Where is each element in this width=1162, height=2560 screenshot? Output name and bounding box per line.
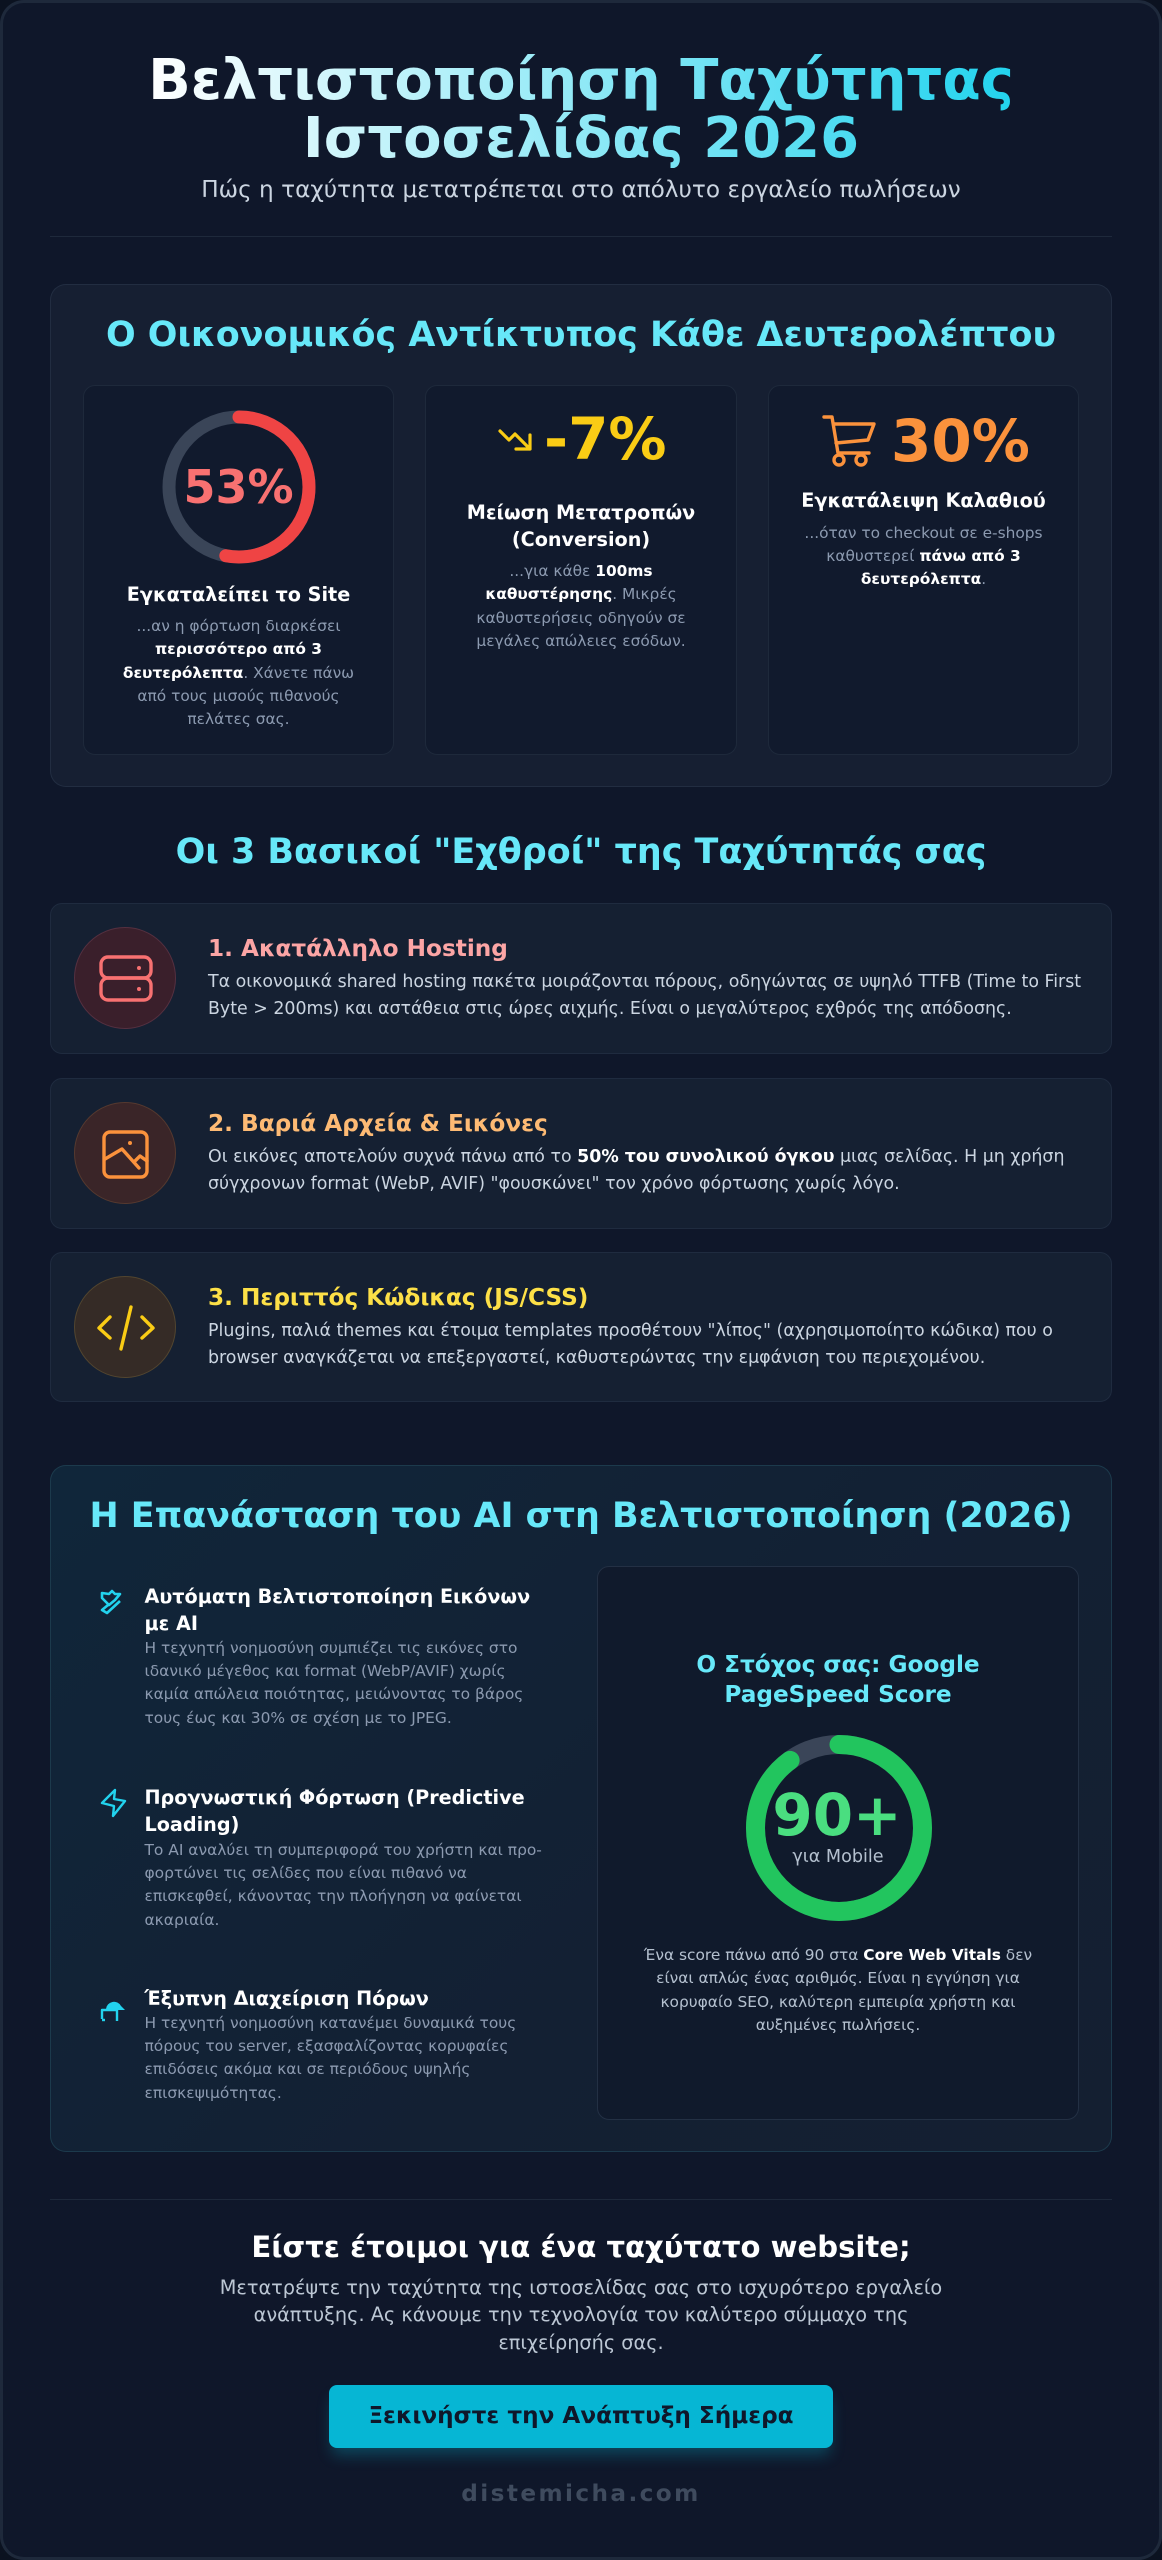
goal heading: PageSpeed Score [724, 1681, 952, 1708]
stat: 30 percent: 30% [891, 407, 1030, 475]
card title: (Conversion) [512, 528, 650, 551]
card description: ...αν η φόρτωση διαρκέσει [136, 617, 341, 635]
feature description [144, 2014, 516, 2102]
card title [467, 501, 695, 551]
footer heading: Είστε έτοιμοι για ένα ταχύτατο website; [251, 2230, 911, 2264]
stat: minus 7 percent: -7% [544, 405, 667, 473]
enemy description: Plugins, παλιά themes και έτοιμα templates προσθέτουν "λίπος" (αχρησιμοποίητο κώδικα) που ο [208, 1321, 1053, 1341]
card description: καθυστερήσεις οδηγούν σε [476, 609, 686, 627]
ring chart: 53 percent [162, 410, 316, 564]
goal heading: Ο Στόχος σας: Google [696, 1650, 980, 1678]
enemy description: Οι εικόνες αποτελούν συχνά πάνω από το 50% του συνολικού όγκου μιας σελίδας. Η μη χρήση [208, 1147, 1064, 1167]
card description [804, 524, 1043, 588]
enemy description [208, 1321, 1053, 1368]
enemy title: 3. Περιττός Κώδικας (JS/CSS) [208, 1284, 588, 1311]
subtitle: Πώς η ταχύτητα μετατρέπεται στο απόλυτο εργαλείο πωλήσεων [201, 176, 961, 202]
card: minus 7 percent conversion [425, 385, 737, 755]
enemy title: 2. Βαριά Αρχεία & Εικόνες [208, 1110, 548, 1137]
enemy title: 1. Ακατάλληλο Hosting [208, 935, 508, 962]
feature description [144, 1840, 542, 1929]
feature description: επισκεψιμότητας. [144, 2084, 282, 2102]
ring chart: 90 plus [746, 1735, 932, 1921]
card: 53 percent leave [83, 385, 394, 755]
feature description: ακαριαία. [144, 1911, 219, 1929]
card title: Εγκατάλειψη Καλαθιού [801, 489, 1046, 512]
icon: lightning bolt [100, 1788, 126, 1818]
icon: resource management [100, 2002, 125, 2022]
enemy description: Τα οικονομικά shared hosting πακέτα μοιράζονται πόρους, οδηγώντας σε υψηλό TTFB (Time to First [208, 972, 1081, 992]
feature description: Η τεχνητή νοημοσύνη κατανέμει δυναμικά τους [144, 2014, 516, 2032]
icon: server [74, 927, 176, 1029]
card description [476, 562, 686, 650]
heading: three enemies: Οι 3 Βασικοί "Εχθροί" της Ταχύτητάς σας [176, 832, 986, 872]
card description: δευτερόλεπτα. Χάνετε πάνω [123, 664, 354, 682]
feature title: predictive loading [144, 1786, 525, 1836]
goal description: Ένα score πάνω από 90 στα Core Web Vitals δεν [644, 1946, 1032, 1964]
stat label: για Mobile [792, 1847, 884, 1867]
footer text: Μετατρέψτε την ταχύτητα της ιστοσελίδας σας στο ισχυρότερο εργαλείο [220, 2276, 942, 2298]
call to action button: Ξεκινήστε την Ανάπτυξη Σήμερα [368, 2403, 794, 2429]
footer text: επιχείρησής σας. [498, 2330, 664, 2354]
feature title: image optimization: Αυτόματη Βελτιστοποίηση Εικόνων [144, 1585, 530, 1608]
feature description: επιδόσεις ακόμα και σε περιόδους υψηλής [144, 2060, 470, 2078]
card description: δευτερόλεπτα. [861, 570, 986, 588]
feature description: φορτώνει τις σελίδες που είναι πιθανό να [144, 1864, 467, 1882]
goal description [644, 1946, 1032, 2034]
icon: shopping cart [822, 415, 876, 467]
stat: 90 plus: 90+ [772, 1781, 902, 1849]
feature description: ιδανικό μέγεθος και format (WebP/AVIF) χωρίς [144, 1662, 506, 1680]
card title: Μείωση Μετατροπών [467, 501, 695, 524]
goal description: είναι απλώς ένας αριθμός. Είναι η εγγύηση για [656, 1969, 1020, 1987]
goal description: αυξημένες πωλήσεις. [756, 2016, 920, 2034]
panel: enemy 3 code [50, 1252, 1112, 1402]
feature title: image optimization [144, 1585, 530, 1635]
card description: ...για κάθε 100ms [509, 562, 653, 580]
footer text [220, 2276, 942, 2354]
panel: economic impact [50, 284, 1112, 787]
panel: enemy 2 images [50, 1078, 1112, 1229]
icon: trending down [498, 429, 532, 451]
enemy description: browser αναγκάζεται να επεξεργαστεί, καθυστερώντας την εμφάνιση του περιεχομένου. [208, 1348, 985, 1368]
call to action button [329, 2385, 833, 2448]
title: Ιστοσελίδας 2026 [303, 106, 859, 171]
goal description: κορυφαίο SEO, καλύτερη εμπειρία χρήστη και [660, 1993, 1016, 2011]
feature description [144, 1638, 523, 1727]
stat: 53 percent: 53% [183, 460, 294, 514]
enemy description [208, 972, 1081, 1019]
enemy description: σύγχρονων format (WebP, AVIF) "φουσκώνει" τον χρόνο φόρτωσης χωρίς λόγο. [208, 1174, 900, 1194]
panel: enemy 1 hosting [50, 903, 1112, 1054]
feature description: Το AI αναλύει τη συμπεριφορά του χρήστη και προ- [144, 1840, 542, 1858]
title: Βελτιστοποίηση Ταχύτητας [148, 48, 1014, 113]
panel: PageSpeed goal [597, 1566, 1079, 2120]
card description: καθυστερεί πάνω από 3 [826, 547, 1021, 565]
card: 30 percent cart abandonment [768, 385, 1079, 755]
card description: καθυστέρησης. Μικρές [485, 585, 677, 603]
feature description: καμία απώλεια ποιότητας, μειώνοντας το βάρος [144, 1685, 523, 1703]
footer text: ανάπτυξης. Ας κάνουμε την τεχνολογία τον καλύτερο σύμμαχο της [254, 2303, 908, 2326]
feature description: πόρους του server, εξασφαλίζοντας κορυφαίες [144, 2037, 508, 2055]
icon: code [74, 1276, 176, 1378]
goal heading [696, 1650, 980, 1708]
card title: Εγκαταλείπει το Site [127, 583, 350, 606]
enemy description [208, 1147, 1064, 1194]
card description: πελάτες σας. [187, 710, 290, 728]
feature description: τους έως και 30% σε σχέση με το JPEG. [144, 1709, 452, 1727]
site name: distemicha.com [461, 2480, 701, 2507]
feature description: Η τεχνητή νοημοσύνη συμπιέζει τις εικόνες στο [144, 1638, 517, 1656]
title [148, 48, 1014, 171]
feature title: predictive loading: Προγνωστική Φόρτωση (Predictive [144, 1786, 525, 1809]
panel: AI revolution [50, 1465, 1112, 2152]
card description [123, 617, 354, 728]
icon: image [74, 1102, 176, 1204]
card description: περισσότερο από 3 [155, 640, 322, 658]
card description: ...όταν το checkout σε e-shops [804, 524, 1043, 542]
heading: AI revolution: Η Επανάσταση του AI στη Βελτιστοποίηση (2026) [89, 1496, 1073, 1536]
card description: μεγάλες απώλειες εσόδων. [476, 632, 686, 650]
card description: από τους μισούς πιθανούς [137, 687, 340, 705]
enemy description: Byte > 200ms) και αστάθεια στις ώρες αιχμής. Είναι ο μεγαλύτερος εχθρός της απόδοσης. [208, 999, 1012, 1019]
feature title: image optimization: με AI [144, 1612, 198, 1635]
icon: image magic [100, 1590, 122, 1614]
feature title: predictive loading: Loading) [144, 1813, 239, 1836]
feature description: επισκεφθεί, κάνοντας την πλοήγηση να φαίνεται [144, 1887, 522, 1905]
feature title: resource management: Έξυπνη Διαχείριση Πόρων [144, 1987, 429, 2010]
heading: economic impact: Ο Οικονομικός Αντίκτυπος Κάθε Δευτερολέπτου [106, 315, 1056, 355]
